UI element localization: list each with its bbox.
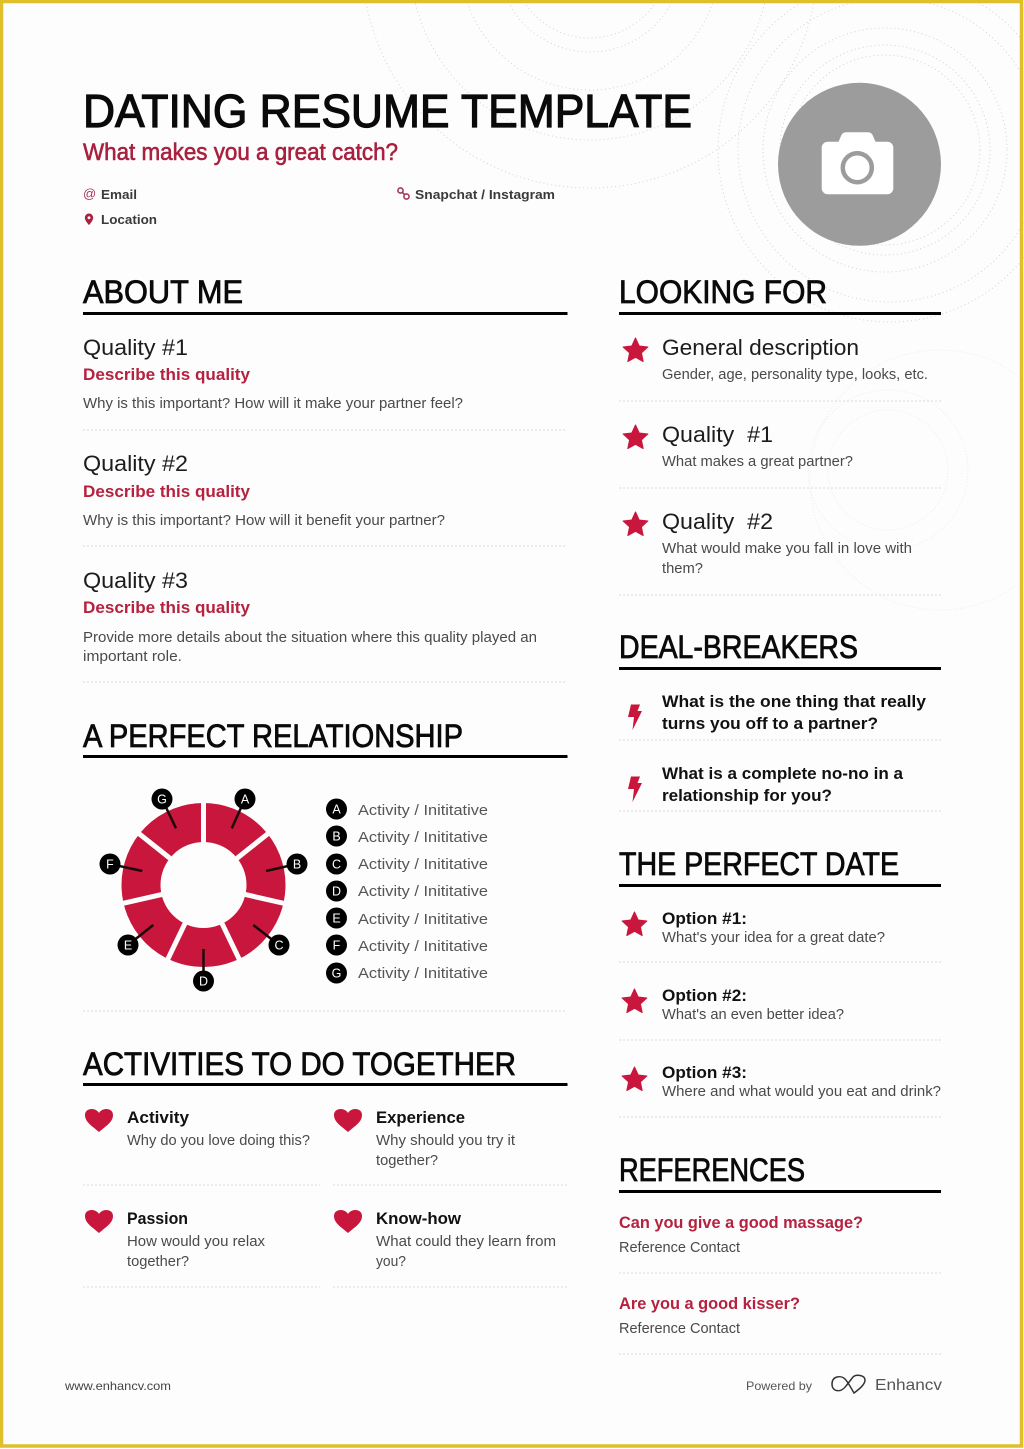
looking quality 1: Quality #1 bbox=[662, 422, 773, 447]
general description: Gender, age, personality type, looks, etc. bbox=[662, 367, 928, 383]
option 1: What's your idea for a great date? bbox=[662, 930, 885, 946]
panel: deal-breakers bbox=[619, 629, 941, 811]
looking quality 2: What would make you fall in love with bbox=[662, 541, 912, 557]
general description bbox=[623, 335, 928, 383]
option 1: Option #1: bbox=[662, 910, 747, 928]
experience item: together? bbox=[376, 1153, 438, 1169]
donut chart: B bbox=[293, 858, 301, 872]
reference 1: Reference Contact bbox=[619, 1240, 740, 1256]
looking quality 2 bbox=[623, 509, 912, 577]
looking quality 2: Quality #2 bbox=[662, 509, 773, 534]
panel: the perfect date bbox=[619, 846, 941, 1117]
heading: the perfect date: THE PERFECT DATE bbox=[619, 846, 899, 882]
activity item: Activity bbox=[127, 1109, 190, 1127]
deal-breaker 2: What is a complete no-no in a bbox=[662, 765, 904, 783]
powered by: Powered by bbox=[746, 1379, 812, 1393]
icon: camera bbox=[822, 132, 893, 194]
option 1 bbox=[622, 910, 885, 946]
location: Location bbox=[101, 212, 157, 227]
title: DATING RESUME TEMPLATE bbox=[83, 85, 692, 137]
legend: Activity / Inititative bbox=[358, 829, 488, 846]
social: Snapchat / Instagram bbox=[415, 187, 555, 202]
legend: C bbox=[332, 858, 341, 872]
passion item: Passion bbox=[127, 1210, 188, 1228]
passion item bbox=[85, 1210, 266, 1270]
legend: E bbox=[332, 912, 341, 926]
heading: references: REFERENCES bbox=[619, 1152, 805, 1188]
quality 1: Why is this important? How will it make your partner feel? bbox=[83, 396, 463, 412]
know-how item: Know-how bbox=[376, 1210, 461, 1228]
icon: enhancv logo bbox=[832, 1375, 865, 1393]
legend bbox=[326, 798, 488, 984]
know-how item bbox=[334, 1210, 556, 1270]
panel: activities to do together bbox=[83, 1046, 568, 1287]
legend: Activity / Inititative bbox=[358, 965, 488, 982]
panel: about me bbox=[83, 274, 568, 682]
know-how item: you? bbox=[376, 1254, 406, 1270]
option 2: What's an even better idea? bbox=[662, 1007, 844, 1023]
looking quality 1: What makes a great partner? bbox=[662, 454, 853, 470]
donut chart: D bbox=[199, 974, 208, 988]
quality 2: Describe this quality bbox=[83, 483, 251, 501]
activity item: Why do you love doing this? bbox=[127, 1133, 310, 1149]
quality 1: Describe this quality bbox=[83, 366, 251, 384]
activity item bbox=[85, 1109, 310, 1149]
deal-breaker 1: What is the one thing that really bbox=[662, 693, 927, 711]
passion item: How would you relax bbox=[127, 1234, 266, 1250]
reference 1 bbox=[619, 1214, 863, 1256]
legend: Activity / Inititative bbox=[358, 802, 488, 819]
icon: location bbox=[85, 214, 93, 225]
heading: looking for: LOOKING FOR bbox=[619, 274, 827, 310]
panel: references bbox=[619, 1152, 941, 1354]
donut chart: G bbox=[157, 792, 167, 806]
legend: G bbox=[332, 966, 341, 980]
quality 3: Quality #3 bbox=[83, 568, 188, 593]
general description: General description bbox=[662, 335, 859, 360]
quality 2: Quality #2 bbox=[83, 451, 188, 476]
option 2: Option #2: bbox=[662, 987, 747, 1005]
experience item bbox=[334, 1109, 515, 1169]
subtitle: What makes you a great catch? bbox=[83, 139, 398, 166]
quality 3: Describe this quality bbox=[83, 599, 251, 617]
legend: D bbox=[332, 884, 341, 898]
reference 1: Can you give a good massage? bbox=[619, 1214, 863, 1232]
reference 2: Are you a good kisser? bbox=[619, 1295, 800, 1313]
icon: link bbox=[398, 188, 409, 199]
heading: a perfect relationship: A PERFECT RELATIONSHIP bbox=[83, 718, 463, 754]
looking quality 1 bbox=[623, 422, 853, 470]
quality 2: Why is this important? How will it benefit your partner? bbox=[83, 513, 445, 529]
email: Email bbox=[101, 187, 137, 202]
website: www.enhancv.com bbox=[64, 1379, 171, 1393]
option 3 bbox=[622, 1064, 941, 1100]
footer bbox=[64, 1375, 942, 1394]
deal-breaker 1 bbox=[628, 693, 927, 733]
photo placeholder bbox=[778, 83, 941, 246]
legend: B bbox=[332, 830, 341, 844]
quality 3 bbox=[83, 568, 537, 665]
header bbox=[83, 85, 692, 227]
deal-breaker 1: turns you off to a partner? bbox=[662, 715, 878, 733]
icon: email: @ bbox=[83, 186, 96, 201]
heading: about me: ABOUT ME bbox=[83, 274, 243, 310]
donut chart bbox=[100, 788, 308, 992]
quality 2 bbox=[83, 451, 445, 529]
donut chart: C bbox=[274, 938, 284, 952]
deal-breaker 2 bbox=[628, 765, 904, 805]
quality 1 bbox=[83, 335, 463, 412]
donut chart: F bbox=[106, 858, 114, 872]
legend: F bbox=[333, 938, 341, 952]
reference 2: Reference Contact bbox=[619, 1321, 740, 1337]
passion item: together? bbox=[127, 1254, 189, 1270]
quality 3: important role. bbox=[83, 649, 182, 665]
legend: A bbox=[332, 802, 341, 816]
donut chart: E bbox=[124, 938, 132, 952]
know-how item: What could they learn from bbox=[376, 1234, 556, 1250]
option 3: Where and what would you eat and drink? bbox=[662, 1084, 941, 1100]
experience item: Experience bbox=[376, 1109, 465, 1127]
reference 2 bbox=[619, 1295, 800, 1337]
heading: deal-breakers: DEAL-BREAKERS bbox=[619, 629, 858, 665]
experience item: Why should you try it bbox=[376, 1133, 515, 1149]
legend: Activity / Inititative bbox=[358, 856, 488, 873]
brand name: Enhancv bbox=[875, 1377, 942, 1394]
quality 1: Quality #1 bbox=[83, 335, 188, 360]
legend: Activity / Inititative bbox=[358, 938, 488, 955]
looking quality 2: them? bbox=[662, 561, 703, 577]
option 3: Option #3: bbox=[662, 1064, 747, 1082]
donut chart: A bbox=[241, 792, 250, 806]
legend: Activity / Inititative bbox=[358, 911, 488, 928]
quality 3: Provide more details about the situation where this quality played an bbox=[83, 630, 537, 646]
deal-breaker 2: relationship for you? bbox=[662, 787, 832, 805]
heading: activities: ACTIVITIES TO DO TOGETHER bbox=[83, 1046, 516, 1082]
option 2 bbox=[622, 987, 844, 1023]
panel: looking for bbox=[619, 274, 941, 595]
legend: Activity / Inititative bbox=[358, 883, 488, 900]
panel: a perfect relationship bbox=[83, 718, 568, 1011]
